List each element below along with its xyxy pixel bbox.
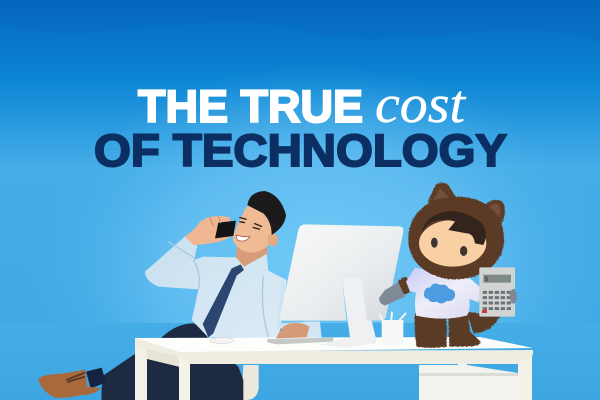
dollar sign: $ (485, 277, 489, 283)
neck (236, 240, 267, 267)
desk items in scene (267, 224, 406, 348)
phone (215, 221, 236, 238)
drawer unit (419, 362, 518, 400)
hand on keyboard (276, 323, 309, 338)
monitor stand (318, 277, 376, 348)
pencils (379, 312, 406, 320)
mitten (379, 282, 405, 306)
desk top (135, 337, 533, 352)
heading: cost script: cost (375, 74, 467, 134)
mouse (210, 338, 234, 344)
man on the phone (38, 191, 320, 400)
calculator (479, 267, 517, 317)
pencil cup (382, 320, 403, 345)
inner ears (433, 188, 501, 217)
shirt cuff (303, 322, 322, 338)
calculator keys (483, 292, 512, 309)
title (94, 74, 507, 176)
eyes and brows (239, 217, 262, 229)
monitor screen back (280, 224, 403, 321)
smile (236, 235, 250, 241)
fingers (210, 216, 221, 227)
hand (185, 216, 232, 245)
mascot with calculator (379, 183, 517, 348)
right sleeve (277, 280, 320, 338)
shirt folds (168, 242, 268, 337)
thumb (510, 289, 517, 304)
ears (427, 183, 505, 225)
calculator body (479, 267, 515, 317)
desk front face (135, 338, 533, 364)
shoe laces (66, 373, 85, 382)
calculator display (483, 275, 511, 283)
left front leg (179, 356, 190, 400)
left inner rail (147, 346, 180, 367)
legs (415, 313, 481, 348)
shoe (38, 369, 101, 398)
ear (267, 234, 278, 246)
head (233, 206, 273, 253)
keyboard (267, 338, 333, 344)
tail (467, 312, 500, 333)
t-shirt (406, 268, 483, 319)
hair (422, 211, 486, 245)
chair (208, 365, 259, 400)
cloud logo (424, 283, 455, 304)
hair (247, 191, 286, 235)
heading: the true: THE TRUE (138, 81, 363, 132)
tie (203, 264, 244, 337)
right leg (518, 352, 532, 400)
eye right (460, 246, 467, 256)
trousers (101, 323, 243, 400)
shirt (145, 235, 287, 338)
desk (135, 337, 533, 400)
heading: of technology: OF TECHNOLOGY (94, 125, 507, 176)
left rear leg (135, 344, 147, 400)
sock (86, 368, 106, 388)
left arm (397, 277, 415, 296)
head hood (408, 197, 504, 279)
eye left (431, 238, 438, 248)
face (419, 220, 486, 267)
red key (482, 310, 487, 313)
